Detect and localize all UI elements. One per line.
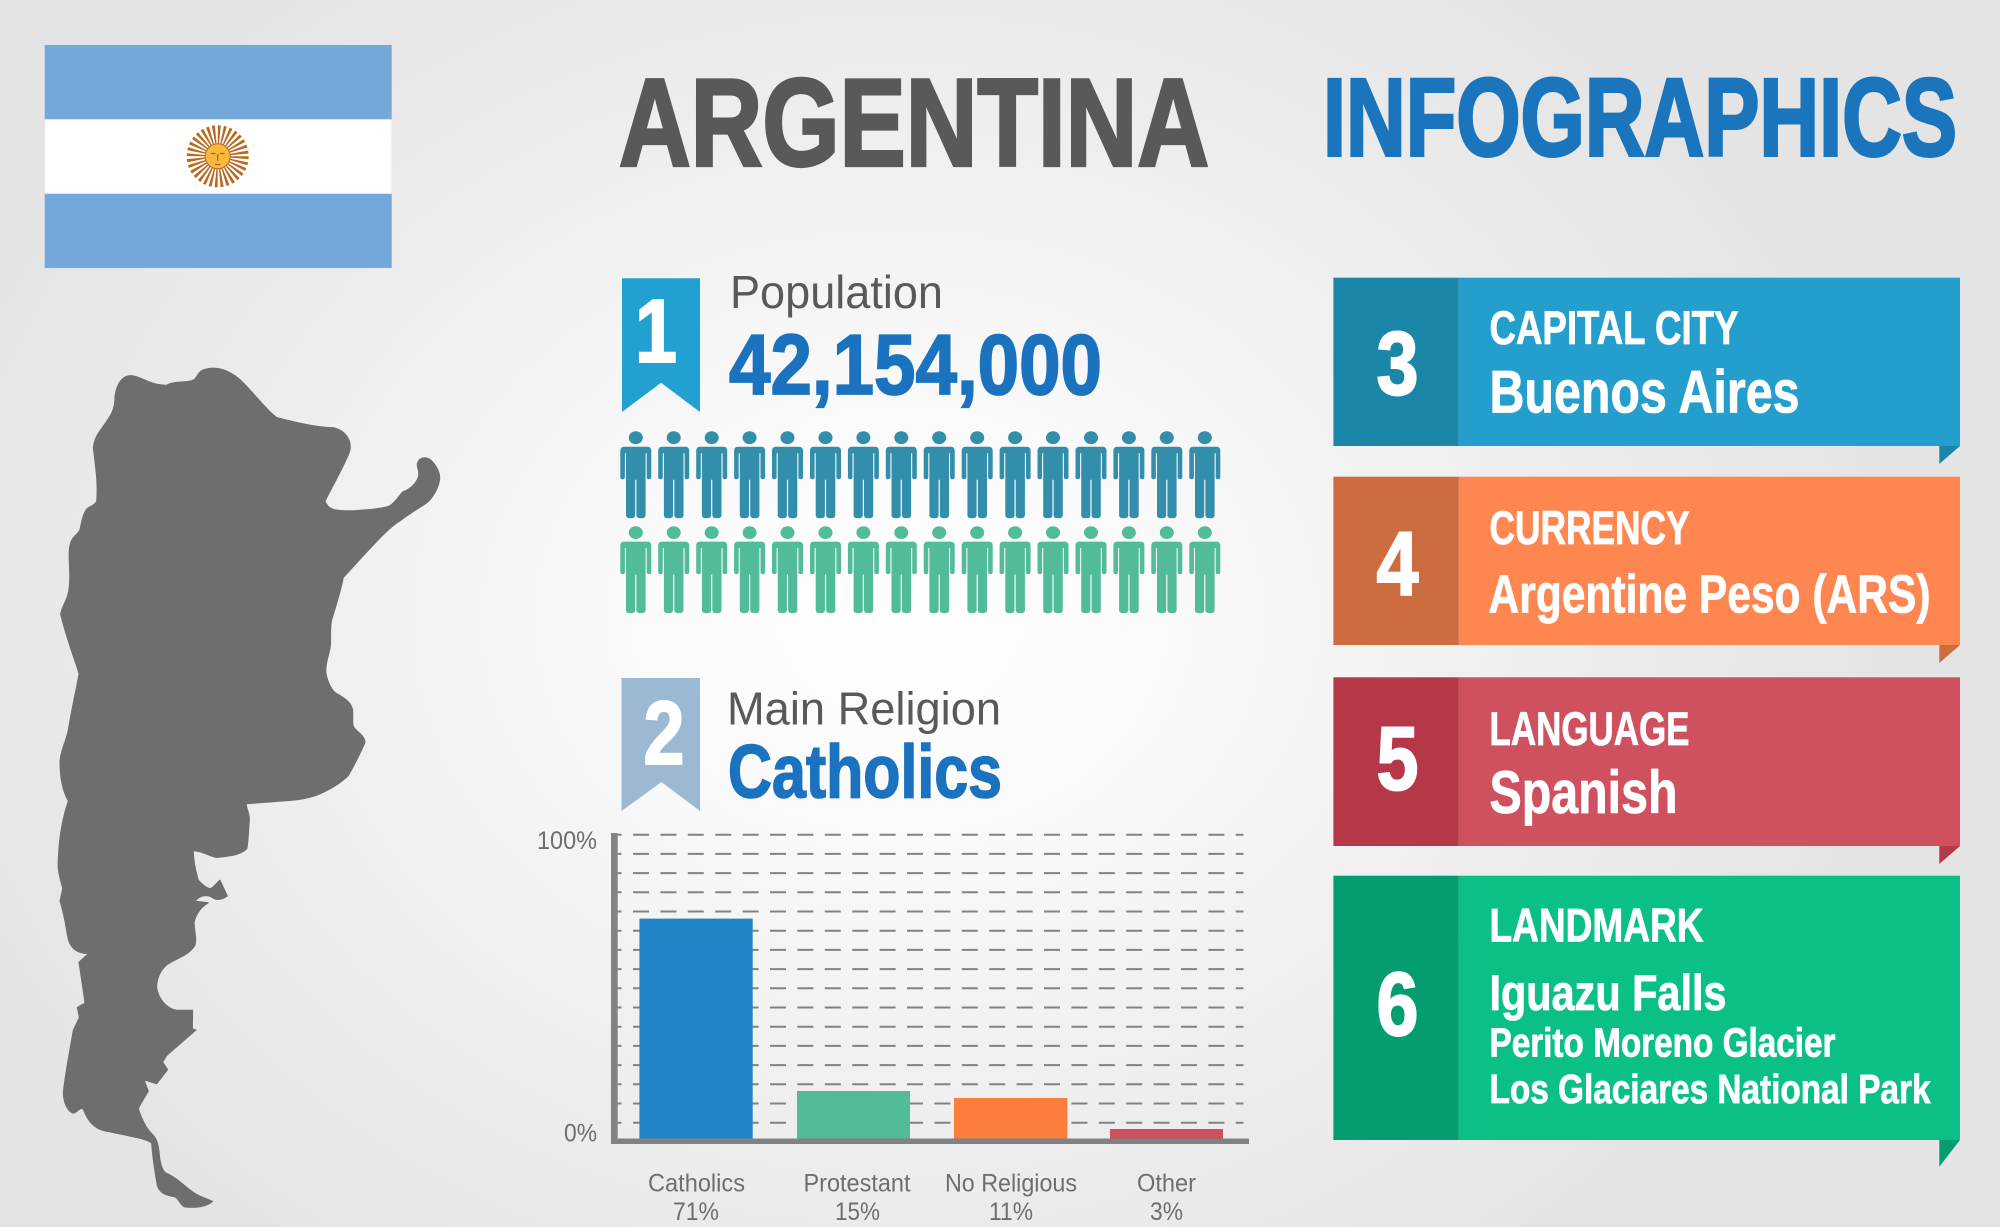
heading: population: Population (730, 266, 943, 318)
main religion value: Catholics (728, 729, 1002, 813)
category label: No Religious 11%: 11% (989, 1198, 1033, 1226)
ribbon badge 1: 1 (635, 282, 677, 382)
panel 4: currency (1333, 477, 1960, 663)
axis label 0%: 0% (564, 1120, 597, 1148)
category label: No Religious 11%: No Religious (945, 1170, 1077, 1198)
category label: Protestant 15%: 15% (835, 1198, 880, 1226)
bar: Catholics (639, 919, 753, 1139)
category label: Other 3% (1137, 1170, 1196, 1226)
value: Perito Moreno Glacier: Perito Moreno Glacier (1490, 1020, 1836, 1066)
label: currency: CURRENCY (1490, 501, 1690, 554)
value: Spanish: Spanish (1490, 759, 1678, 826)
label: landmark: LANDMARK (1490, 899, 1704, 952)
value: Iguazu Falls: Iguazu Falls (1490, 965, 1726, 1021)
category label: No Religious 11% (945, 1170, 1077, 1226)
bar: Other (1110, 1129, 1223, 1139)
section 2: main religion (537, 678, 1249, 1226)
panel 6: landmark (1333, 876, 1960, 1167)
ribbon badge 1 (622, 278, 700, 412)
ribbon badge 2 (622, 678, 700, 811)
number 6: 6 (1376, 955, 1418, 1055)
category label: Protestant 15%: Protestant (804, 1170, 911, 1198)
flag of Argentina (45, 45, 392, 268)
number 4: 4 (1376, 514, 1418, 614)
map of Argentina (58, 368, 440, 1207)
bar chart (537, 827, 1249, 1226)
panel 5: language (1333, 677, 1960, 864)
panel 3: capital city (1333, 278, 1960, 464)
ribbon badge 2: 2 (644, 684, 684, 784)
pictogram row: green people (620, 526, 1220, 613)
number 5: 5 (1376, 710, 1418, 810)
category label: Other 3%: 3% (1150, 1198, 1183, 1226)
category label: Catholics 71%: 71% (673, 1198, 719, 1226)
label: language: LANGUAGE (1490, 702, 1690, 755)
bar: Protestant (797, 1091, 910, 1139)
icon: sun of May (196, 135, 239, 178)
population figure: 42,154,000 (729, 318, 1102, 413)
section 1: population (620, 266, 1220, 613)
chart axes (611, 833, 1249, 1144)
category label: Protestant 15% (804, 1170, 911, 1226)
label: capital city: CAPITAL CITY (1490, 301, 1738, 354)
number 3: 3 (1376, 314, 1418, 414)
bar: No Religious (954, 1098, 1067, 1139)
pictogram row: dark people (620, 431, 1220, 518)
category label: Catholics 71%: Catholics (648, 1170, 745, 1198)
title: Argentina: ARGENTINA (619, 54, 1209, 192)
value: Buenos Aires: Buenos Aires (1490, 358, 1800, 426)
heading: main religion: Main Religion (727, 682, 1001, 734)
axis label 100%: 100% (537, 827, 597, 855)
category label: Catholics 71% (648, 1170, 745, 1226)
category label: Other 3%: Other (1137, 1170, 1196, 1198)
